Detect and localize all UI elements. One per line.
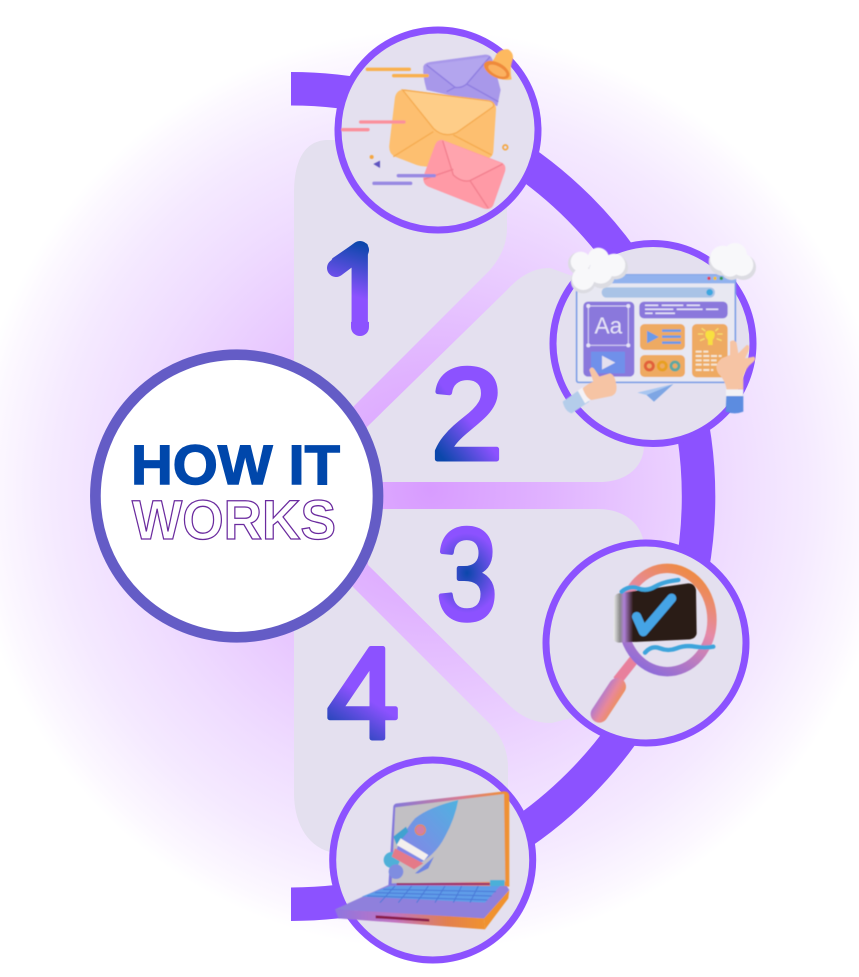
heading: works: WORKS xyxy=(132,488,336,551)
icon: magnifier with check mark xyxy=(599,568,713,714)
panel: step 3 sector xyxy=(368,509,644,723)
heading: how it: HOW IT xyxy=(131,433,340,496)
icon: web page design: Aa xyxy=(594,313,623,339)
panel: step 1 sector xyxy=(294,140,507,420)
number 1 xyxy=(327,241,369,336)
panel: step 2 sector xyxy=(367,268,644,482)
number 1: 1 xyxy=(322,219,393,362)
panel: step 4 sector xyxy=(294,573,508,860)
number 2: 2 xyxy=(431,341,503,487)
circle: step 4 xyxy=(333,760,533,960)
icon: web page design xyxy=(563,243,756,413)
circle: step 2 xyxy=(553,244,753,444)
center badge xyxy=(95,355,378,637)
circle: step 3 xyxy=(546,543,746,743)
circle: step 1 xyxy=(338,30,538,230)
big arc connector xyxy=(291,89,699,904)
number 4: 4 xyxy=(327,620,399,766)
number 3: 3 xyxy=(437,502,497,647)
icon: laptop with rocket xyxy=(335,791,509,929)
icon: envelopes xyxy=(343,49,513,209)
